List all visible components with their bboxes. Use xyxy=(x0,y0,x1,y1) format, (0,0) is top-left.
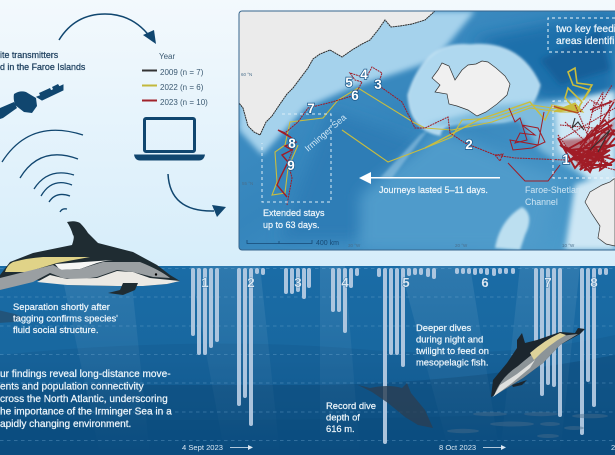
map track: 2023 red xyxy=(277,67,615,205)
route numbers xyxy=(287,67,570,173)
map track: 2009 black xyxy=(572,118,610,152)
text: separation: tagging confirms species' xyxy=(13,312,118,324)
route numbers: 9 xyxy=(287,158,295,173)
legend: year: 2009 (n = 7) xyxy=(160,68,204,77)
text: deeper dives: twilight to feed on xyxy=(416,345,489,356)
dive segment numbers: 1 xyxy=(201,275,209,290)
dive segment numbers: 4 xyxy=(341,275,349,290)
map graticule labels: 20 °W xyxy=(455,243,468,248)
date label: 8 Oct 2023: 8 Oct 2023 xyxy=(439,443,476,452)
arrow: to year legend xyxy=(59,14,156,44)
legend: year: 2022 (n = 6) xyxy=(160,83,204,92)
text: separation xyxy=(13,301,118,335)
dashed box: Faroe area xyxy=(553,101,615,178)
label: Irminger Sea: Irminger Sea xyxy=(303,112,348,154)
text: deeper dives xyxy=(416,322,489,368)
route numbers: 6 xyxy=(351,88,359,103)
map bathymetry xyxy=(239,11,615,250)
label: extended stays: Extended stays xyxy=(263,208,325,218)
text: findings paragraph: ents and population connectivity xyxy=(0,382,145,392)
text: findings paragraph: ur findings reveal long-distance move- xyxy=(0,369,171,380)
label: extended stays: up to 63 days. xyxy=(263,220,320,230)
text: record dive: 616 m. xyxy=(326,423,355,434)
route numbers: 3 xyxy=(374,77,382,92)
dive segment numbers: 6 xyxy=(481,275,489,290)
route numbers: 4 xyxy=(360,67,368,82)
map land: Greenland xyxy=(239,11,435,135)
legend: year: 2023 (n = 10) xyxy=(160,98,208,107)
water depth bands xyxy=(0,335,615,455)
icon: common dolphin at surface xyxy=(0,221,180,295)
label: Faroe-Shetland Channel xyxy=(525,186,580,205)
icon: satellite xyxy=(0,84,63,119)
dive segment numbers: 7 xyxy=(544,275,552,290)
icon: fish school xyxy=(447,412,608,438)
background: upper panel xyxy=(0,0,615,266)
text: record dive xyxy=(326,400,376,434)
map border xyxy=(239,11,615,250)
text: findings paragraph: cross the North Atlantic, underscoring xyxy=(0,394,168,405)
panel: dive profile water xyxy=(0,266,615,455)
label: satellite transmitters: ite transmitters xyxy=(0,50,59,60)
label: Faroe-Shetland Channel: Channel xyxy=(525,197,558,207)
label: satellite transmitters xyxy=(0,50,86,72)
icon: laptop xyxy=(134,118,205,160)
map graticule labels: 55 °N xyxy=(242,181,253,186)
dive segment numbers: 3 xyxy=(294,275,302,290)
map graticule labels: 30 °W xyxy=(348,243,361,248)
text: separation: Separation shortly after xyxy=(13,301,110,312)
map land: Scotland xyxy=(585,178,615,246)
route numbers: 2 xyxy=(465,137,473,152)
text: feeding areas: two key feedi xyxy=(556,24,615,35)
label: satellite transmitters: d in the Faroe Islands xyxy=(0,62,86,72)
arrow: journey direction xyxy=(359,172,500,184)
text: feeding areas: areas identifi xyxy=(556,36,614,47)
map graticule labels xyxy=(241,72,575,248)
map graticule labels: 60 °N xyxy=(241,72,252,77)
text: deeper dives: Deeper dives xyxy=(416,322,472,333)
icon: signal waves xyxy=(2,130,83,212)
label: journeys: Journeys lasted 5–11 days. xyxy=(379,185,488,195)
text: separation: fluid social structure. xyxy=(13,324,98,335)
route numbers: 1 xyxy=(562,152,570,167)
arrow: to map xyxy=(168,174,226,217)
date label: 4 Sept 2023 xyxy=(182,443,253,452)
dive depth bars xyxy=(191,268,608,444)
dive segment numbers: 8 xyxy=(590,275,598,290)
text: findings paragraph: apidly changing environment. xyxy=(0,419,131,430)
route numbers: 5 xyxy=(345,75,353,90)
text: record dive: depth of xyxy=(326,412,360,422)
map sea xyxy=(239,11,615,250)
date label: 4 Sept 2023: 4 Sept 2023 xyxy=(182,443,223,452)
depth gridlines xyxy=(0,268,615,440)
icon: dolphin shadow deep xyxy=(358,383,433,428)
text: feeding areas xyxy=(556,24,615,44)
date label: 8 Oct 2023 xyxy=(439,443,506,452)
icon: dolphin shadow left xyxy=(0,310,24,323)
text: record dive: Record dive xyxy=(326,400,376,411)
scale bar xyxy=(246,240,338,245)
route numbers: 7 xyxy=(307,101,315,116)
dive segment numbers xyxy=(201,275,598,290)
dashed box: Irminger xyxy=(262,114,331,202)
dive segment numbers: 5 xyxy=(402,275,410,290)
text: deeper dives: mesopelagic fish. xyxy=(416,356,488,368)
text: findings paragraph: he importance of the Irminger Sea in a xyxy=(0,406,172,418)
dive segment numbers: 2 xyxy=(247,275,255,290)
scale bar: 400 km xyxy=(316,240,339,247)
dashed box: feeding areas xyxy=(548,18,615,52)
legend: year xyxy=(142,52,208,107)
map: North Atlantic tracks xyxy=(239,11,615,250)
map land: Iceland xyxy=(432,61,510,116)
map graticule labels: 10 °W xyxy=(562,243,575,248)
legend: year: Year xyxy=(159,52,176,61)
route numbers: 8 xyxy=(288,136,296,151)
text: deeper dives: during night and xyxy=(416,334,483,344)
label: Faroe-Shetland Channel: Faroe-Shetland xyxy=(525,185,586,195)
text: findings paragraph xyxy=(0,369,172,430)
map track: 2022 yellow xyxy=(272,68,592,195)
label: extended stays xyxy=(263,208,325,230)
light rays xyxy=(60,266,580,455)
icon: dolphin diving xyxy=(491,328,585,397)
